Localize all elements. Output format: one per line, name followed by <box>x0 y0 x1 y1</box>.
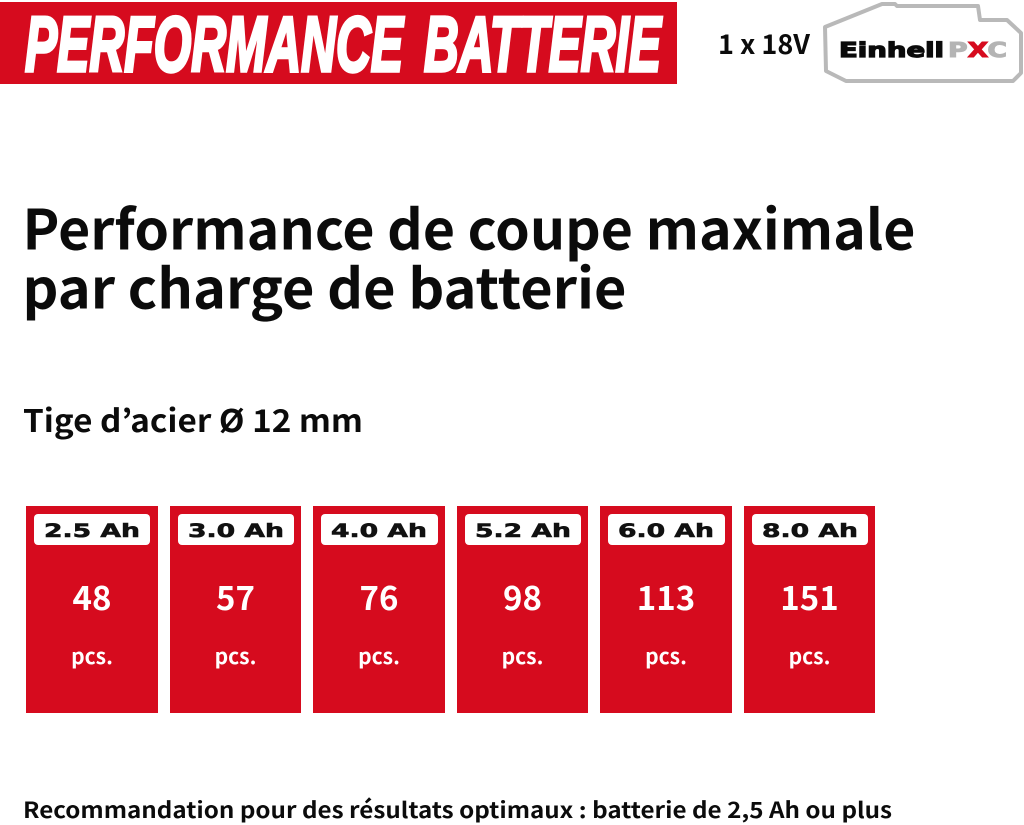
card: 6.0 Ah: pcs. <box>645 641 687 671</box>
card: 8.0 Ah: 151 <box>780 572 839 620</box>
card: 4.0 Ah: 76 <box>360 572 398 620</box>
card: 8.0 Ah: 8.0 Ah <box>762 520 858 542</box>
card: 2.5 Ah <box>26 506 158 713</box>
card: 4.0 Ah <box>313 506 445 713</box>
card: 2.5 Ah: 2.5 Ah <box>44 520 140 542</box>
icon: Einhell PXC battery: Einhell <box>839 38 944 62</box>
card: 5.2 Ah: 98 <box>503 572 542 620</box>
card: 3.0 Ah: 57 <box>216 572 255 620</box>
card: 6.0 Ah <box>600 506 732 713</box>
card: 6.0 Ah: 6.0 Ah <box>618 520 714 542</box>
heading: Performance de coupe maximale <box>22 186 916 266</box>
banner: performance batterie: BATTERIE <box>424 0 662 88</box>
heading: par charge de batterie <box>22 244 626 324</box>
card: 8.0 Ah <box>744 506 875 713</box>
card: 4.0 Ah: 4.0 Ah <box>331 520 427 542</box>
icon: Einhell PXC battery <box>825 4 1021 81</box>
card: 5.2 Ah <box>457 506 588 713</box>
card: 2.5 Ah: pcs. <box>71 641 113 671</box>
card: 2.5 Ah: 48 <box>73 572 111 620</box>
card: 3.0 Ah <box>170 506 301 713</box>
battery voltage label: 1 x 18V <box>718 23 810 62</box>
card: 3.0 Ah: 3.0 Ah <box>188 520 284 542</box>
card: 8.0 Ah: pcs. <box>789 641 830 671</box>
banner: performance batterie: PERFORMANCE <box>25 0 404 88</box>
footer recommendation: Recommandation pour des résultats optimaux : batterie de 2,5 Ah ou plus <box>23 793 892 825</box>
card: 5.2 Ah: pcs. <box>502 641 543 671</box>
card: 5.2 Ah: 5.2 Ah <box>475 520 571 542</box>
icon: Einhell PXC battery: PXC <box>948 38 1007 62</box>
card: 4.0 Ah: pcs. <box>358 641 400 671</box>
heading <box>22 186 916 324</box>
card: 3.0 Ah: pcs. <box>215 641 256 671</box>
subheading: Tige d’acier Ø 12 mm <box>23 396 363 441</box>
card: 6.0 Ah: 113 <box>637 572 695 620</box>
